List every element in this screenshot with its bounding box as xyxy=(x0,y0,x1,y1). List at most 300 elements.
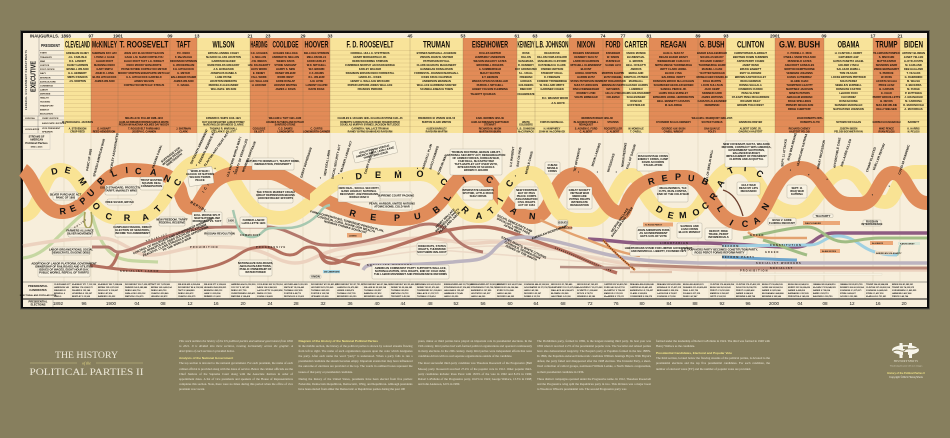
candidate results by election: CHRISTENSEN 0 265,411 xyxy=(231,292,256,295)
callout: prohibition 18th amendment: THE STOCK MARKET CRASH xyxy=(256,190,295,194)
candidate results by election: LaROUCHE 0 78,807 xyxy=(657,293,678,295)
callout: great society: GREAT SOCIETY xyxy=(569,188,591,192)
cabinet officials: BYRNES MARSHALL ACHESON xyxy=(417,51,456,55)
candidate results by election: CLINTON 370 44,908,254 xyxy=(710,283,735,286)
stream labels: Republican letters: B xyxy=(431,203,442,216)
cabinet officials: BLOCK LYNG xyxy=(665,71,682,75)
stream labels: Republican letters: N xyxy=(529,211,536,221)
cabinet officials: SHINSEKI McDONALD xyxy=(835,103,862,107)
callout: September 11: KATRINA xyxy=(791,192,803,196)
cabinet officials: KATZENBACH CLARK xyxy=(538,63,566,67)
judiciary and legislature rows: ROCKEFELLER xyxy=(604,128,622,130)
panel: election year row: 04 xyxy=(134,301,140,306)
president names: T. ROOSEVELT xyxy=(120,40,169,50)
callout: truman doctrine: INTEGRATION OF SCHOOLS xyxy=(458,165,495,169)
cabinet officials: DUNCAN xyxy=(630,99,642,103)
callout: small bottom note xyxy=(310,275,321,279)
candidate results by election: THOMAS 0 99,557 xyxy=(364,289,382,292)
candidate results by election: BENTLEY 0 13,969 xyxy=(72,296,91,298)
callout: carter 1980 xyxy=(637,153,669,171)
candidate results by election: WEAVER 22 xyxy=(54,289,67,292)
candidate results by election: NADER 0 465,650 xyxy=(788,289,806,292)
cabinet officials: BERGLAND xyxy=(629,71,643,75)
candidate results by election: ROOSEVELT 336 7,630,557 xyxy=(125,284,152,286)
candidate results by election: GORE 266 50,996,116 xyxy=(762,287,784,289)
cabinet officials: RICHARD RILEY xyxy=(740,99,761,103)
judiciary and legislature rows: WHITE xyxy=(522,121,530,124)
callout: gold standard xyxy=(100,185,142,195)
cabinet officials: ANTONY BLINKEN xyxy=(902,51,925,55)
president names: CLINTON xyxy=(737,40,764,50)
rotated event labels above streams: WOMEN'S SUFFRAGE xyxy=(241,141,257,173)
cabinet officials: VENEMAN JOHANNS xyxy=(786,71,813,75)
judiciary and legislature rows: CHARLES E. HUGHES 1930–41 HARLAN STONE 1941–46 xyxy=(338,117,403,120)
cabinet officials: RUSK xyxy=(522,51,530,55)
rotated event labels above streams: NATO FOUNDED xyxy=(428,145,440,170)
callout: Perot xyxy=(705,228,732,240)
candidate results by election: DEBS 0 87,814 xyxy=(98,292,113,295)
judiciary and legislature rows: GOLDBERG xyxy=(519,124,533,127)
rotated event labels above streams: MARSHALL PLAN xyxy=(421,143,433,170)
candidate results by election: PAUL 0 431,750 xyxy=(683,289,699,292)
cabinet officials: KELLY NIELSEN xyxy=(876,107,897,111)
cabinet officials: REDFIELD ALEXANDER xyxy=(209,83,238,87)
candidate results by election: NADER 0 2,831,066 xyxy=(762,289,782,292)
cabinet officials: BRENNAN USERY xyxy=(602,83,625,87)
cabinet officials: ADAMS GOLDSCHMIDT xyxy=(621,91,651,95)
cabinet officials: THOMPSON LEAVITT xyxy=(786,83,813,87)
callout: taft-hartley: RIGHTS, THURMOND xyxy=(418,247,446,251)
callout: progressive plan: NATIONALIZE RAILROADS, xyxy=(238,261,273,265)
callout: socialism: OWNERSHIP OF RAILROADS AND UTILITIES xyxy=(35,264,93,268)
cabinet officials: JANET YELLEN xyxy=(904,55,923,59)
judiciary and legislature rows: ALBERT GORE JR. xyxy=(740,128,762,130)
stream labels: Democratic letters: M xyxy=(679,210,687,220)
cabinet officials: BLUMENTHAL xyxy=(627,55,645,59)
judiciary and legislature rows: HOLMES SUTHERLAND BUTLER xyxy=(266,121,304,124)
candidate results by election: EISENHOWER 442 33,778,963 xyxy=(444,283,474,286)
callout: small bottom note: UNION xyxy=(311,275,320,279)
cabinet officials: J. GRANHOLM xyxy=(904,95,923,99)
stream: Green xyxy=(743,227,927,255)
candidate results by election: ANDERSON 0 5,719,437 xyxy=(630,289,654,292)
cabinet officials: ASPIN PERRY COHEN xyxy=(737,59,764,63)
stream labels: Democratic letters: E xyxy=(64,165,72,176)
cabinet officials: PRICE AZAR xyxy=(879,83,894,87)
candidate results by election: BUSH 426 48,881,221 xyxy=(683,283,704,286)
callout: labor: LABOR ORGANIZATIONS, SOCIAL xyxy=(49,248,94,252)
callout: return to normalcy: RETURN TO NORMALCY, TEAPOT DOME, xyxy=(246,159,300,163)
rotated event labels above streams: NEW DEAL LAWS xyxy=(323,150,331,176)
candidate results by election: TRUMP 304 62,984,828 xyxy=(866,283,889,286)
callout: new frontier xyxy=(515,187,538,209)
callout: great society: VOTING RIGHTS xyxy=(569,197,590,201)
candidate results by election: THURMOND 39 1,169,063 xyxy=(417,290,442,292)
rotated dark notes: OF MONOPOLIES, DEBS SOCIALIST PLATFORM xyxy=(142,222,207,254)
stream labels: Democratic letters: E xyxy=(375,170,381,180)
cabinet officials: ELAINE CHAO xyxy=(791,79,808,83)
president names: HARDING xyxy=(250,40,268,50)
stream: Progressive and Socialist Workers xyxy=(320,227,617,273)
header row: inaugurations: 1893 xyxy=(61,33,71,38)
header row: inaugurations: 17 xyxy=(871,33,876,38)
judiciary and legislature rows: G. HOBART xyxy=(97,128,111,130)
cabinet officials: R. KENNEDY xyxy=(518,63,534,67)
judiciary and legislature rows: L.B. JOHNSON xyxy=(517,128,535,130)
cabinet officials: DONNA SHALALA xyxy=(739,83,762,87)
judiciary and legislature rows: RICHARD CHENEY xyxy=(789,128,811,130)
callout: truman doctrine: OF ARMED FORCES, KOREAN WAR, xyxy=(452,156,500,160)
judiciary and legislature rows: EARL WARREN 1953–69 xyxy=(476,117,505,120)
candidate results by election: HARDING 404 16,152,200 xyxy=(231,283,256,286)
header row: inaugurations: 23 xyxy=(266,33,271,38)
judiciary and legislature rows: GILLETT xyxy=(254,130,265,134)
callout: September 11: IRAQ WAR xyxy=(790,189,804,193)
callout: cold war top xyxy=(352,141,398,163)
judiciary and legislature rows: W. PECKHAM H. JACKSON xyxy=(62,121,93,124)
row labels: COMMERCE xyxy=(40,86,54,88)
stream labels: Democratic letters: O xyxy=(691,206,701,218)
candidate results by election: JOHNSON 0 1,275,971 xyxy=(840,290,862,292)
candidates label: PRESIDENTIAL xyxy=(28,284,48,288)
cabinet officials: BRUCE BABBITT xyxy=(740,67,762,71)
panel: election year row: 76 xyxy=(613,301,619,306)
stream: Socialist Workers lilac xyxy=(363,237,927,270)
candidate results by election: TRUMP 232 74,223,975 xyxy=(892,286,915,289)
candidate results by election: CLEVELAND 277 xyxy=(54,283,71,286)
callout: Perot: DEFICIT, FREE xyxy=(709,229,728,233)
candidate results by election: BROWDER 0 46,251 xyxy=(364,295,384,298)
cabinet officials: GARY SMITH xyxy=(96,67,113,71)
candidate results by election: HANLY 0 220,506 xyxy=(204,292,221,295)
callout: farmer-labor xyxy=(240,217,267,228)
candidate results by election: NIXON 301 31,785,480 xyxy=(551,283,573,286)
candidate results by election: FORD 240 39,147,793 xyxy=(604,286,625,289)
cabinet officials: SCHWELLENBACH TOBIN xyxy=(420,87,453,91)
cabinet officials xyxy=(66,51,925,111)
cabinet officials: T. VILSACK xyxy=(906,71,921,75)
callout: new frontier: ACT OF 1964 xyxy=(518,203,535,207)
judiciary and legislature rows: JOHN ROBERTS 2005– xyxy=(797,117,824,120)
panel: election year row: 20 xyxy=(901,301,907,306)
cabinet officials: BRYAN LANSING COLBY xyxy=(208,51,239,55)
row labels: PRESIDENT xyxy=(41,43,60,48)
cabinet officials: E. CHAO xyxy=(881,91,892,95)
callout: electoral result: RUSSIAN xyxy=(866,220,878,224)
cabinet officials: ROMNEY LYNN xyxy=(577,91,596,95)
candidate results by election: KENNEDY 303 34,227,096 xyxy=(497,283,523,286)
candidate results by election: GRITZ 0 106,152 xyxy=(710,296,727,298)
callout: Tea Party xyxy=(813,214,833,218)
callout: annual tag: 1920 xyxy=(228,218,234,222)
row labels: ENERGY xyxy=(40,110,50,112)
callout: socialist workers: AMERICAN COMMUNIST PARTY SUPPORTS WALLACE, xyxy=(375,266,447,270)
president names: NIXON xyxy=(577,40,595,50)
callout: savings and loan: SAVINGS AND xyxy=(680,224,699,228)
cabinet officials: CALIFANO HARRIS xyxy=(624,83,648,87)
stream labels: Republican letters: C xyxy=(742,219,749,229)
candidate results by election: EISENHOWER 457 35,581,003 xyxy=(471,283,501,286)
cabinet officials: F. MacVEAGH xyxy=(175,55,192,59)
text column: Prohibition and Progressive: The Prohibition party, formed in 1869, is the longest running third party. Its best year was 1892 when it received 2.2% of the presidential popular vote. The Socialist and related parties have also demonstrated longevity. The People's party or Populists formed in the late 1880's. In 1896, the Populists endorsed Democratic candidate William Jennings Bryan. With Bryan's defeat, the party failed and disappeared after the 1908 election. The Unionist Party, a short-lived collection of radical groups, nominated William Lemke, a North Dakota congressman, as their presidential candidate in 1936. xyxy=(537,338,651,374)
callout: contract with America xyxy=(722,141,772,167)
cabinet officials: A.S. BURLESON xyxy=(213,67,234,71)
orange and blue party tags: ALAN KEYES xyxy=(822,250,837,253)
stream labels: Republican letters: A xyxy=(150,167,158,178)
rotated dark notes: COUGHLIN, LONG, SHARE OUR WEALTH xyxy=(317,214,375,234)
panel: election year row: 84 xyxy=(666,301,672,306)
rotated dark notes: CONTROL OF RAILROADS AND GOVERNMENT OWNERSHIP xyxy=(132,216,214,255)
candidate results by election: ROMNEY 206 60,933,504 xyxy=(840,286,865,289)
candidate results by election: JOHNSON 0 4,489,341 xyxy=(866,289,888,292)
candidate results by election: REAGAN 525 54,281,858 xyxy=(657,283,682,286)
candidate results by election: BALDWIN 0 199,750 xyxy=(813,295,833,298)
candidate results by election: BROWDER 0 80,159 xyxy=(337,296,357,298)
callout: court packing: SUPREME COURT PACKING xyxy=(378,194,414,198)
judiciary and legislature rows: GEORGE H.W. BUSH xyxy=(662,128,686,130)
orange and blue party tags: H. WALLACE xyxy=(559,227,573,230)
stream labels: Republican letters: E xyxy=(68,203,78,214)
rotated event labels above streams: U.S. ENTERS WORLD WAR I xyxy=(226,136,242,177)
candidate results by election: BARR 0 523,715 xyxy=(813,292,829,295)
candidate results by election: McCAIN 173 59,948,323 xyxy=(813,286,837,289)
panel: election year row: 16 xyxy=(875,301,881,306)
candidate results by election: BENSON 0 585,113 xyxy=(204,290,223,292)
cabinet officials: HOLDER LYNCH xyxy=(838,63,859,67)
cabinet officials: REICH HERMAN xyxy=(740,79,761,83)
callout: carter 1980: ENERGY CRISIS, CAMP xyxy=(638,157,668,161)
cabinet officials: O. FREEMAN xyxy=(544,75,560,79)
text column: third parties: The most successful third-party candidate was Theodore Roosevelt of the Progressive (Bull Moose) party. Roosevelt received 27.4% of the popular vote in 1912. Other popular third-party candidates include: Ross Perot with 18.9% of the vote in 1992 and 8.4% in 1996; Robert LaFollette of the Progressive party, 16.6% in 1924; George Wallace, 13.5% in 1968; and John Anderson, 6.6% in 1980. xyxy=(418,361,532,386)
cabinet officials: STONE SARGENT xyxy=(274,63,297,67)
panel: election year row: 64 xyxy=(533,301,539,306)
cabinet officials: CELEBREZZE xyxy=(517,92,535,96)
candidate results by election: WING 0 xyxy=(54,296,62,298)
callout: trust busting: SQUARE DEAL xyxy=(142,181,162,185)
title block: of the xyxy=(82,361,91,366)
rotated event labels above streams: MUELLER REPORT xyxy=(872,142,886,171)
cabinet officials: ZINKE BERNHARDT xyxy=(874,67,899,71)
cabinet officials: KENNEDY SHULTZ xyxy=(574,55,598,59)
callout: electoral result: INTERFERENCE xyxy=(862,222,883,226)
candidate results by election: COX 127 9,147,353 xyxy=(231,286,250,289)
third party stream names: PROGRESSIVE xyxy=(256,246,286,249)
header row: inaugurations: 77 xyxy=(621,33,626,38)
cabinet officials: BROWN TOGO WEST xyxy=(737,103,764,107)
cabinet officials: PRINCIPI NICHOLSON xyxy=(786,103,813,107)
stream labels: Democratic letters: C xyxy=(754,168,766,180)
judiciary and legislature rows: RICHARD M. NIXON xyxy=(479,128,502,130)
candidate results by election: BROWNE 0 485,798 xyxy=(736,295,756,298)
rotated event labels above streams: SOCIAL SECURITY ACT xyxy=(330,144,342,179)
cabinet officials: HUFSTEDLER xyxy=(627,103,645,107)
judiciary and legislature rows: ROBERTS ALITO xyxy=(800,121,820,124)
callout: annual tag xyxy=(227,218,235,223)
stream labels: Republican letters: C xyxy=(135,166,142,177)
cabinet officials: ANDRUS xyxy=(630,67,642,71)
cabinet officials: GOLDBERG xyxy=(518,83,534,87)
cabinet officials: X. BECERRA xyxy=(906,83,922,87)
rotated event labels above streams: SEPT. 11 ATTACKS xyxy=(780,139,788,167)
cabinet officials: SEBELIUS BURWELL xyxy=(835,83,862,87)
judiciary and legislature rows: FORTAS MARSHALL xyxy=(540,121,564,124)
judiciary and legislature rows: HARLAN BRENNAN WHITTAKER xyxy=(471,121,509,124)
stream labels: Democratic letters: R xyxy=(459,204,471,216)
candidate results by election: PALMER 0 133,148 xyxy=(72,289,91,292)
cabinet officials: BAKER EAGLEBURGER xyxy=(697,51,727,55)
cabinet officials: LLOYD AUSTIN xyxy=(904,59,923,63)
row labels: EXECUTIVE xyxy=(28,61,38,92)
stream labels: Democratic letters: A xyxy=(476,211,483,221)
callout: contract with America: NEW COVENANT, NAFTA, WELFARE xyxy=(723,142,770,146)
stream labels: Republican letters: N xyxy=(759,201,771,212)
callout: reaganomics: END OF THE COLD WAR xyxy=(657,192,689,196)
cabinet officials: PAYNE WYNNE CORTELYOU MEYER xyxy=(121,67,167,71)
stream labels: Republican letters: I xyxy=(461,175,468,185)
cabinet officials: LEWIS DOLE BURNLEY xyxy=(659,91,688,95)
orange and blue party tags: AMERICAN SOLIDARITY xyxy=(876,252,902,255)
cabinet officials: EDWARDS HODEL HERRINGTON xyxy=(653,95,694,99)
cabinet officials: BELL BENNETT CAVAZOS xyxy=(657,99,690,103)
cabinet officials: REGAN BAKER BRADY xyxy=(659,55,688,59)
candidate results by election: HALSTEAD 0 41,300 xyxy=(551,295,572,298)
callout: return to normalcy: IMMIGRATION, PROSPERITY xyxy=(255,162,292,166)
callout: contract with America: GOVERNMENT SHUTDOWN, xyxy=(728,148,765,152)
judiciary and legislature rows: C. ALBERT xyxy=(607,130,620,134)
cabinet officials: STANS PETERSON DENT xyxy=(570,79,602,83)
judiciary and legislature rows: C.G. DAWES xyxy=(278,128,293,130)
candidate results by election: PEROT 0 19,741,065 xyxy=(710,289,730,292)
row labels: TREASURY xyxy=(40,56,52,59)
cabinet officials: CISNEROS CUOMO xyxy=(738,87,763,91)
judiciary and legislature rows: REHNQUIST xyxy=(579,124,594,127)
callout: fair deal xyxy=(369,201,415,210)
judiciary and legislature rows: ALBEN BARKLEY xyxy=(426,128,447,130)
callout: women's vote: INCOME TAX AMENDMENT xyxy=(115,231,150,235)
judiciary and legislature rows: GORSUCH KAVANAUGH xyxy=(872,121,901,124)
stream labels: Democratic letters: E xyxy=(667,210,675,221)
third party stream names: PROHIBITION xyxy=(190,246,218,249)
rotated event labels above streams: GREAT DEPRESSION xyxy=(299,146,313,178)
judiciary and legislature rows xyxy=(62,117,920,134)
cabinet officials: DAY GRONOUSKI xyxy=(515,67,537,71)
stream labels: Democratic letters: C xyxy=(700,199,711,212)
judiciary and legislature rows: CLARK xyxy=(179,130,188,134)
text column: third parties: years, minor or third parties have played an important role in presidential elections. In the 19th century, third parties had well-formed political organizations and operated continuously in many elections. In the 20th century, many third parties were independent efforts that were candidate-driven with no real separate organizations outside of the candidate. xyxy=(418,338,532,358)
candidate results by election: THOMAS 0 881,951 xyxy=(311,289,330,292)
legend title box xyxy=(23,134,50,150)
cabinet officials: H. HOOVER xyxy=(252,83,266,87)
cabinet officials: JACK KEMP xyxy=(704,87,720,91)
logo: HistoryShots xyxy=(892,343,919,358)
president names: TAFT xyxy=(176,40,191,50)
candidate results by election: TEICHERT 0 45,336 xyxy=(391,295,411,298)
callout: contract with America: IMPEACHMENT OF PRESIDENT xyxy=(726,154,767,158)
judiciary and legislature rows: GINGRICH HASTERT xyxy=(739,130,763,134)
candidate results by election: DEBS 0 420,793 xyxy=(151,289,167,292)
panel: election year row: 20 xyxy=(240,301,246,306)
stream labels: Democratic letters xyxy=(50,163,766,223)
rotated event labels above streams: COURT PACKING xyxy=(363,148,375,175)
panel: election year row: 16 xyxy=(213,301,219,306)
judiciary and legislature rows: MIKE PENCE xyxy=(879,128,894,130)
cabinet officials: JAMES WILSON xyxy=(94,79,115,83)
callout: silver issue: SILVER PURCHASE ACT xyxy=(50,192,82,196)
cabinet officials: WATT CLARK HODEL xyxy=(660,67,687,71)
callout: taft-hartley xyxy=(417,243,447,255)
callout: truman doctrine: BROWN V. BOARD xyxy=(464,168,488,172)
row labels: HEALTH xyxy=(40,96,49,100)
callout: progressive plan: WATER POWER xyxy=(245,270,266,274)
candidate results by election: LEVERING 0 132,007 xyxy=(72,293,93,295)
third party stream names: SOCIALIST xyxy=(770,267,793,270)
callout: truman doctrine: TRUMAN DOCTRINE, BERLIN AIRLIFT, xyxy=(451,150,501,154)
cabinet officials: M. WALSH xyxy=(907,79,920,83)
cabinet officials: SAXBE LEVI xyxy=(605,63,621,67)
callout: carter 1980: DAVID ACCORDS xyxy=(642,160,664,164)
cabinet officials: DENT RICHARDSON xyxy=(600,79,626,83)
stream labels: Democratic letters: I xyxy=(165,193,174,200)
cabinet officials: DAVIS DOAK xyxy=(308,87,325,91)
callout: cold war top: ISOLATIONISM VERSUS xyxy=(359,143,390,155)
judiciary and legislature rows: BURTON CLARK MINTON xyxy=(422,121,451,124)
cabinet officials: COLEMAN xyxy=(606,95,620,99)
callout: new deal: NEW DEAL, SOCIAL SECURITY, xyxy=(339,186,380,190)
candidate results by election: COOLIDGE 382 15,725,016 xyxy=(257,284,284,286)
callout: socialist workers: NATIONALIZATION, CIVIL RIGHTS, END OF COLD WAR, xyxy=(375,269,446,273)
cabinet officials: FORRESTAL JOHNSON MARSHALL xyxy=(414,71,459,75)
rotated dark notes: HENRY WALLACE xyxy=(435,208,456,229)
text column: third parties xyxy=(418,338,532,386)
cabinet officials: SESSIONS BARR xyxy=(876,63,897,67)
callout: fair deal: ATOMIC BOMB, COLD WAR xyxy=(374,204,410,208)
header row: inaugurations: 21 xyxy=(898,33,903,38)
cabinet officials: WEEKS DAVIS xyxy=(277,59,295,63)
cabinet officials: HARRY S. NEW xyxy=(276,67,296,71)
stream: Prohibition xyxy=(23,238,927,270)
candidate results by election: REYNOLDS 0 21,603 xyxy=(284,296,305,298)
panel: election year row: 04 xyxy=(797,301,803,306)
callout: socialism: ADOPTION OF LABOR PLATFORM, GOVERNMENT xyxy=(31,262,97,266)
judiciary and legislature rows: MARTIN RAYBURN xyxy=(479,130,501,134)
cabinet officials: WILSON McELROY GATES xyxy=(473,59,507,63)
cabinet officials: MOSBACHER FRANKLIN xyxy=(697,75,728,79)
cabinet officials: MINETA PETERS xyxy=(789,91,810,95)
judiciary and legislature rows: FOLEY xyxy=(708,130,716,134)
candidate results by election: MacBRIDE 0 173,011 xyxy=(604,296,625,298)
callout: labor: DEMOCRATS, EUGENE DEBS xyxy=(52,250,90,254)
callout: reaganomics: REAGANOMICS, TAX xyxy=(659,186,687,190)
callout: socialism xyxy=(31,261,97,277)
callout: Reform party: AND INDIVIDUAL LIBERTY, FOUNDED 1971 xyxy=(631,249,687,253)
rotated dark notes: TO THE WORLD WAR xyxy=(162,236,192,252)
stream labels: Republican letters: L xyxy=(715,204,727,214)
candidate results by election: BUSH 271 50,456,169 xyxy=(762,283,783,286)
cabinet officials: C. NAGEL xyxy=(177,83,190,87)
judiciary and legislature rows: STEWART xyxy=(484,124,496,127)
callout: bull moose split xyxy=(192,212,222,226)
rotated dark notes: SOCIAL DEMOCRATS AND xyxy=(496,213,534,234)
event dots on bands xyxy=(196,165,905,195)
cabinet officials: H. BROWN xyxy=(629,59,643,63)
candidate results by election: HOOVER 444 21,391,381 xyxy=(284,283,309,286)
callout: gulf war xyxy=(737,182,760,195)
candidate results by election: ROOSEVELT 523 27,751,597 xyxy=(337,284,365,286)
president names: REAGAN xyxy=(660,40,687,50)
callout: truman doctrine: FAIR DEAL, McCARTHYISM xyxy=(458,159,494,163)
stream labels: Democratic letters: A xyxy=(715,178,727,189)
orange and blue party tags: LEMKE xyxy=(349,235,357,237)
